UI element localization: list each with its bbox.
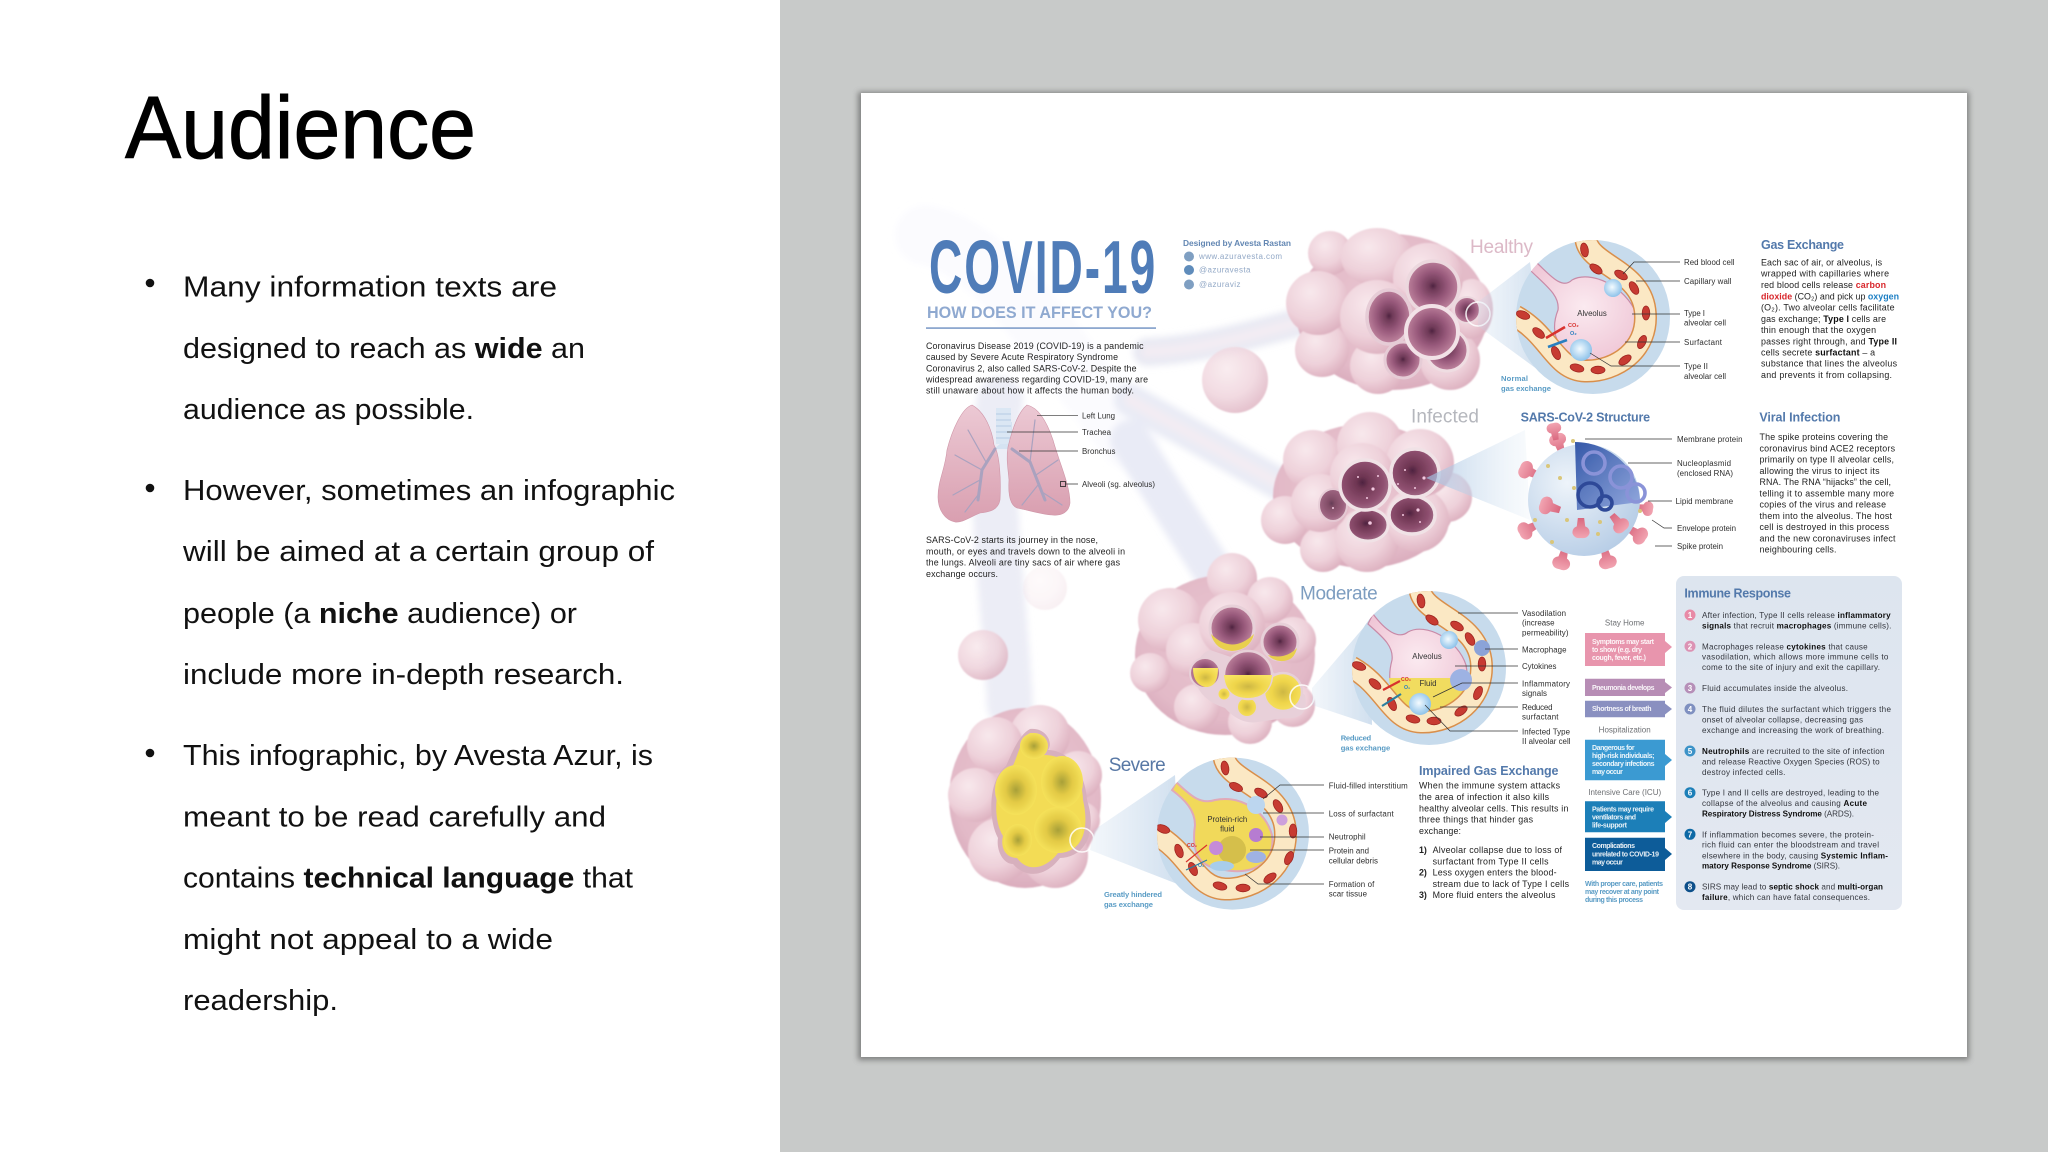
recovery note: may recover at any point	[1585, 889, 1660, 896]
step 2: 2	[1688, 642, 1693, 651]
step 4: onset of alveolar collapse, decreasing gas	[1702, 715, 1863, 724]
viral infection text	[1759, 411, 1896, 555]
healthy labels: Capillary wall	[1684, 277, 1732, 286]
lung labels: Alveoli (sg. alveolus)	[1082, 480, 1155, 489]
viral infection text: copies of the virus and release	[1760, 500, 1886, 510]
detail: moderate alveolus: CO₂	[1401, 677, 1412, 683]
step 4: exchange and increasing the work of breathing.	[1702, 726, 1884, 735]
panel: slide text	[125, 78, 675, 1017]
severe labels: Formation of	[1329, 880, 1375, 889]
detail: healthy alveolus: O₂	[1570, 331, 1577, 337]
stage: symptoms: to show (e.g. dry	[1592, 647, 1642, 654]
step 5: 5	[1688, 747, 1693, 756]
gas exchange text: and prevents it from collapsing.	[1761, 370, 1892, 380]
viral infection text: telling it to assemble many more	[1760, 488, 1894, 498]
recovery note	[1585, 881, 1663, 904]
lung labels	[1082, 412, 1155, 489]
stage: dangerous: Dangerous for	[1592, 745, 1635, 752]
moderate labels: permeability)	[1522, 628, 1569, 637]
severe labels: Loss of surfactant	[1329, 809, 1394, 818]
heading: Healthy: Healthy	[1470, 237, 1534, 258]
stage: ventilators	[1585, 801, 1672, 832]
viral infection text: them into the alveolus. The host	[1760, 511, 1893, 521]
moderate labels: Vasodilation	[1522, 609, 1566, 618]
stage: shortness of breath	[1585, 701, 1672, 717]
step 6: Respiratory Distress Syndrome (ARDS).	[1702, 810, 1854, 819]
designer credits: www.azuravesta.com	[1198, 252, 1282, 261]
bullet list: second point: However, sometimes an infographic	[183, 475, 675, 507]
cluster: severe alveoli	[948, 705, 1102, 888]
impaired gas exchange text: the area of infection it also kills	[1419, 792, 1550, 802]
gas exchange text: (O₂). Two alveolar cells facilitate	[1761, 303, 1895, 313]
impaired gas exchange text: 1)	[1419, 845, 1427, 855]
caption: normal gas exchange	[1501, 374, 1551, 393]
step 1: signals that recruit macrophages (immune cells).	[1702, 622, 1891, 631]
severe labels	[1329, 781, 1408, 899]
virus labels: (enclosed RNA)	[1677, 469, 1733, 478]
flow: progression of symptoms	[1585, 619, 1672, 904]
stage: complications: unrelated to COVID-19	[1592, 852, 1659, 858]
healthy labels: alveolar cell	[1684, 372, 1726, 381]
healthy labels: Red blood cell	[1684, 258, 1735, 267]
lung labels: Left Lung	[1082, 412, 1115, 421]
impaired gas exchange text	[1419, 764, 1570, 900]
viral infection text: cell is destroyed in this process	[1760, 522, 1890, 532]
step 5	[1684, 746, 1884, 777]
caption: reduced gas exchange	[1341, 734, 1390, 753]
stage: ventilators: ventilators and	[1592, 814, 1636, 822]
bullet list: third point: readership.	[183, 985, 338, 1017]
step 6: 6	[1688, 789, 1693, 798]
gas exchange text: dioxide (CO₂) and pick up oxygen	[1761, 291, 1899, 301]
virus labels: Membrane protein	[1677, 435, 1742, 444]
journey text: mouth, or eyes and travels down to the alveoli in	[926, 546, 1125, 556]
moderate labels: Inflammatory	[1522, 679, 1570, 688]
airway tubes background	[925, 235, 1300, 705]
detail: moderate alveolus: Fluid	[1420, 679, 1436, 688]
step 4: 4	[1688, 705, 1693, 714]
intro text	[925, 341, 1148, 396]
detail: healthy alveolus	[1478, 240, 1680, 394]
journey text	[926, 535, 1125, 579]
lung labels: Bronchus	[1082, 447, 1116, 456]
step 5: and release Reactive Oxygen Species (ROS) to	[1702, 757, 1880, 766]
caption: reduced gas exchange: Reduced	[1341, 734, 1372, 743]
flow: progression of symptoms: Stay Home	[1605, 619, 1645, 628]
moderate labels: (increase	[1522, 619, 1555, 628]
intro text: widespread awareness regarding COVID-19, many are	[925, 375, 1148, 385]
moderate labels	[1522, 609, 1571, 746]
caption: reduced gas exchange: gas exchange	[1341, 744, 1390, 753]
designer credits	[1183, 238, 1291, 290]
heading: Moderate: Moderate	[1300, 583, 1378, 604]
gas exchange text: thin enough that the oxygen	[1761, 325, 1876, 335]
detail: severe alveolus: CO₂	[1187, 843, 1198, 849]
healthy labels: Type II	[1684, 362, 1708, 371]
step 3: Fluid accumulates inside the alveolus.	[1702, 684, 1848, 693]
heading: Infected: Infected	[1411, 407, 1479, 428]
viral infection text: primarily on type II alveolar cells,	[1760, 455, 1894, 465]
healthy labels: alveolar cell	[1684, 318, 1726, 328]
gas exchange text: cells secrete surfactant – a	[1761, 348, 1875, 358]
infographic title: COVID-19	[929, 227, 1158, 310]
stage: ventilators: life-support	[1592, 822, 1628, 830]
impaired gas exchange text: three things that hinder gas	[1419, 815, 1534, 825]
intro text: caused by Severe Acute Respiratory Syndrome	[926, 352, 1118, 362]
viral infection text: and the new coronaviruses infect	[1760, 533, 1896, 543]
caption: greatly hindered gas exchange: Greatly hindered	[1104, 890, 1162, 899]
detail: moderate alveolus	[1312, 590, 1518, 745]
bullet list: first point: designed to reach as wide an	[183, 333, 585, 365]
impaired gas exchange text: stream due to lack of Type I cells	[1433, 879, 1570, 889]
journey text: SARS-CoV-2 starts its journey in the nose,	[926, 535, 1098, 545]
stage: shortness of breath: Shortness of breath	[1592, 706, 1652, 713]
designer credits: @azuravesta	[1199, 266, 1251, 274]
severe labels: scar tissue	[1329, 890, 1368, 899]
stage: complications: Complications	[1592, 843, 1635, 850]
virus labels: Nucleoplasmid	[1677, 459, 1731, 468]
step 7: elsewhere in the body, causing Systemic Inflam-	[1702, 851, 1888, 860]
impaired gas exchange text: Less oxygen enters the blood-	[1433, 868, 1557, 878]
detail: healthy alveolus: Alveolus	[1577, 309, 1607, 318]
step 1	[1684, 610, 1891, 631]
panel: gray background	[780, 0, 2048, 1152]
step 7: If inflammation becomes severe, the protein-	[1702, 830, 1874, 839]
caption: normal gas exchange: Normal	[1501, 374, 1528, 383]
impaired gas exchange text: healthy alveolar cells. This results in	[1419, 803, 1568, 813]
step 6: collapse of the alveolus and causing Acute	[1702, 799, 1867, 808]
stage: symptoms: cough, fever, etc.)	[1592, 655, 1646, 662]
bullet list: third point: might not appeal to a wide	[183, 924, 553, 956]
gas exchange text: red blood cells release carbon	[1761, 280, 1886, 290]
step 5: destroy infected cells.	[1702, 768, 1785, 777]
bullet list: second point	[146, 475, 675, 691]
step 6: Type I and II cells are destroyed, leading to the	[1702, 789, 1879, 798]
heading: SARS-CoV-2 Structure: SARS-CoV-2 Structure	[1521, 411, 1650, 425]
step 2: vasodilation, which allows more immune cells to	[1702, 653, 1889, 662]
stage: dangerous: high-risk individuals;	[1592, 753, 1654, 760]
impaired gas exchange text: More fluid enters the alveolus	[1433, 890, 1556, 900]
stage: symptoms: Symptoms may start	[1592, 639, 1655, 646]
viral infection text: Viral Infection	[1759, 411, 1840, 425]
step 4	[1684, 704, 1891, 735]
viral infection text: neighbouring cells.	[1760, 545, 1836, 555]
designer credits: @azuraviz	[1199, 280, 1240, 289]
recovery note: during this process	[1585, 897, 1643, 904]
step 5: Neutrophils are recruited to the site of infection	[1702, 747, 1884, 756]
impaired gas exchange text: 3)	[1419, 890, 1427, 900]
flow: progression of symptoms: Intensive Care (ICU)	[1588, 788, 1661, 797]
cluster: healthy alveoli	[1286, 228, 1493, 394]
gas exchange text: gas exchange; Type I cells are	[1761, 314, 1886, 324]
moderate labels: Infected Type	[1522, 727, 1571, 736]
detail: healthy alveolus: CO₂	[1568, 323, 1579, 329]
step 7: 7	[1688, 830, 1693, 839]
virus labels	[1676, 435, 1742, 551]
impaired gas exchange text: Alveolar collapse due to loss of	[1433, 845, 1563, 855]
healthy labels	[1684, 258, 1735, 381]
stage: pneumonia: Pneumonia develops	[1592, 685, 1655, 692]
step 8: failure, which can have fatal consequences.	[1702, 893, 1870, 902]
stage: complications: may occur	[1592, 860, 1623, 866]
viral infection text: RNA. The RNA “hijacks” the cell,	[1760, 477, 1891, 487]
icon: lungs diagram	[938, 405, 1078, 522]
virus labels: Envelope protein	[1677, 524, 1736, 533]
title: Audience	[125, 78, 476, 177]
detail: moderate alveolus: Alveolus	[1412, 652, 1442, 661]
healthy labels: Type I	[1684, 309, 1705, 318]
gas exchange text: passes right through, and Type II	[1761, 336, 1897, 346]
gas exchange text: substance that lines the alveolus	[1761, 359, 1898, 369]
step 8: SIRS may lead to septic shock and multi-organ	[1702, 883, 1883, 892]
intro text: Coronavirus 2, also called SARS-CoV-2. Despite the	[926, 363, 1137, 373]
impaired gas exchange text: Impaired Gas Exchange	[1419, 764, 1559, 778]
step 7: rich fluid can enter the bloodstream and travel	[1702, 841, 1879, 850]
step 2	[1684, 641, 1889, 672]
moderate labels: Reduced	[1522, 703, 1552, 712]
moderate labels: signals	[1522, 689, 1547, 698]
bullet list: third point	[146, 740, 653, 1017]
step 8: 8	[1688, 883, 1693, 892]
bullet list: first point: audience as possible.	[183, 394, 474, 426]
bullet list: first point	[146, 272, 585, 426]
moderate labels: Macrophage	[1522, 645, 1567, 654]
detail: moderate alveolus: O₂	[1404, 685, 1411, 691]
severe labels: Fluid-filled interstitium	[1329, 781, 1408, 790]
viral infection text: allowing the virus to inject its	[1760, 466, 1880, 476]
step 6	[1684, 787, 1879, 819]
bullet list: third point: This infographic, by Avesta Azur, is	[183, 740, 653, 772]
viral infection text: The spike proteins covering the	[1760, 432, 1888, 442]
panel: infographic card	[858, 92, 1969, 1060]
step 2: Macrophages release cytokines that cause	[1702, 642, 1868, 651]
step 1: 1	[1688, 611, 1693, 620]
detail: severe alveolus: fluid	[1220, 824, 1234, 834]
stage: ventilators: Patients may require	[1592, 806, 1654, 814]
gas exchange text: Each sac of air, or alveolus, is	[1761, 258, 1883, 268]
bullet list: second point: people (a niche audience) or	[183, 598, 577, 630]
stage: pneumonia	[1585, 679, 1672, 696]
detail: severe alveolus: O₂	[1198, 863, 1205, 869]
severe labels: cellular debris	[1329, 856, 1378, 865]
caption: greatly hindered gas exchange: gas exchange	[1104, 900, 1153, 909]
gas exchange text	[1760, 238, 1899, 380]
step 1: After infection, Type II cells release inflammatory	[1702, 611, 1891, 620]
intro text: Coronavirus Disease 2019 (COVID-19) is a pandemic	[926, 341, 1144, 351]
pale alveolus balls	[958, 347, 1268, 680]
detail: severe alveolus: Protein-rich	[1207, 815, 1247, 824]
stage: symptoms	[1585, 633, 1672, 666]
stage: dangerous: secondary infections	[1592, 761, 1655, 768]
icon: coronavirus structure	[1426, 422, 1672, 572]
bullet list: first point: Many information texts are	[183, 272, 557, 304]
intro text: still unaware about how it affects the human body.	[926, 386, 1134, 396]
healthy labels: Surfactant	[1684, 338, 1723, 347]
subtitle: HOW DOES IT AFFECT YOU?	[927, 304, 1152, 322]
step 2: come to the site of injury and exit the capillary.	[1702, 663, 1880, 672]
caption: normal gas exchange: gas exchange	[1501, 384, 1551, 393]
impaired gas exchange text: 2)	[1419, 868, 1427, 878]
stage: dangerous: may occur	[1592, 769, 1623, 776]
detail: severe alveolus	[1090, 757, 1324, 910]
designer credits: Designed by Avesta Rastan	[1183, 238, 1291, 248]
lung labels: Trachea	[1082, 428, 1112, 437]
severe labels: Protein and	[1329, 847, 1369, 856]
step 8	[1684, 881, 1883, 902]
severe labels: Neutrophil	[1329, 833, 1366, 842]
viral infection text: coronavirus bind ACE2 receptors	[1760, 443, 1896, 453]
cluster: infected alveoli	[1261, 412, 1472, 572]
caption: greatly hindered gas exchange	[1104, 890, 1162, 909]
step 7: matory Response Syndrome (SIRS).	[1702, 862, 1840, 871]
virus labels: Lipid membrane	[1676, 497, 1734, 506]
panel: immune response	[1676, 576, 1902, 910]
bullet list: third point: contains technical language that	[183, 862, 633, 894]
step 7	[1684, 829, 1888, 871]
bullet list: second point: will be aimed at a certain group of	[182, 536, 655, 568]
bullet list: second point: include more in-depth research.	[183, 659, 624, 691]
heading: Severe: Severe	[1109, 755, 1166, 776]
recovery note: With proper care, patients	[1585, 881, 1663, 888]
flow: progression of symptoms: Hospitalization	[1599, 726, 1651, 735]
gas exchange text: Gas Exchange	[1761, 238, 1844, 252]
step 4: The fluid dilutes the surfactant which triggers the	[1702, 705, 1891, 714]
impaired gas exchange text: When the immune system attacks	[1419, 781, 1561, 791]
stage: dangerous	[1585, 740, 1672, 780]
stage: complications	[1585, 838, 1672, 871]
moderate labels: II alveolar cell	[1522, 737, 1571, 746]
virus labels: Spike protein	[1677, 542, 1723, 551]
impaired gas exchange text: exchange:	[1419, 826, 1461, 836]
moderate labels: surfactant	[1522, 713, 1559, 722]
impaired gas exchange text: surfactant from Type II cells	[1433, 856, 1549, 866]
cluster: moderate alveoli	[1130, 553, 1316, 744]
gas exchange text: wrapped with capillaries where	[1760, 269, 1889, 279]
bullet list: third point: meant to be read carefully and	[183, 802, 606, 834]
journey text: exchange occurs.	[926, 569, 998, 579]
panel: immune response: Immune Response	[1684, 587, 1791, 601]
moderate labels: Cytokines	[1522, 662, 1557, 671]
journey text: the lungs. Alveoli are tiny sacs of air where gas	[926, 558, 1121, 568]
step 3: 3	[1688, 684, 1693, 693]
